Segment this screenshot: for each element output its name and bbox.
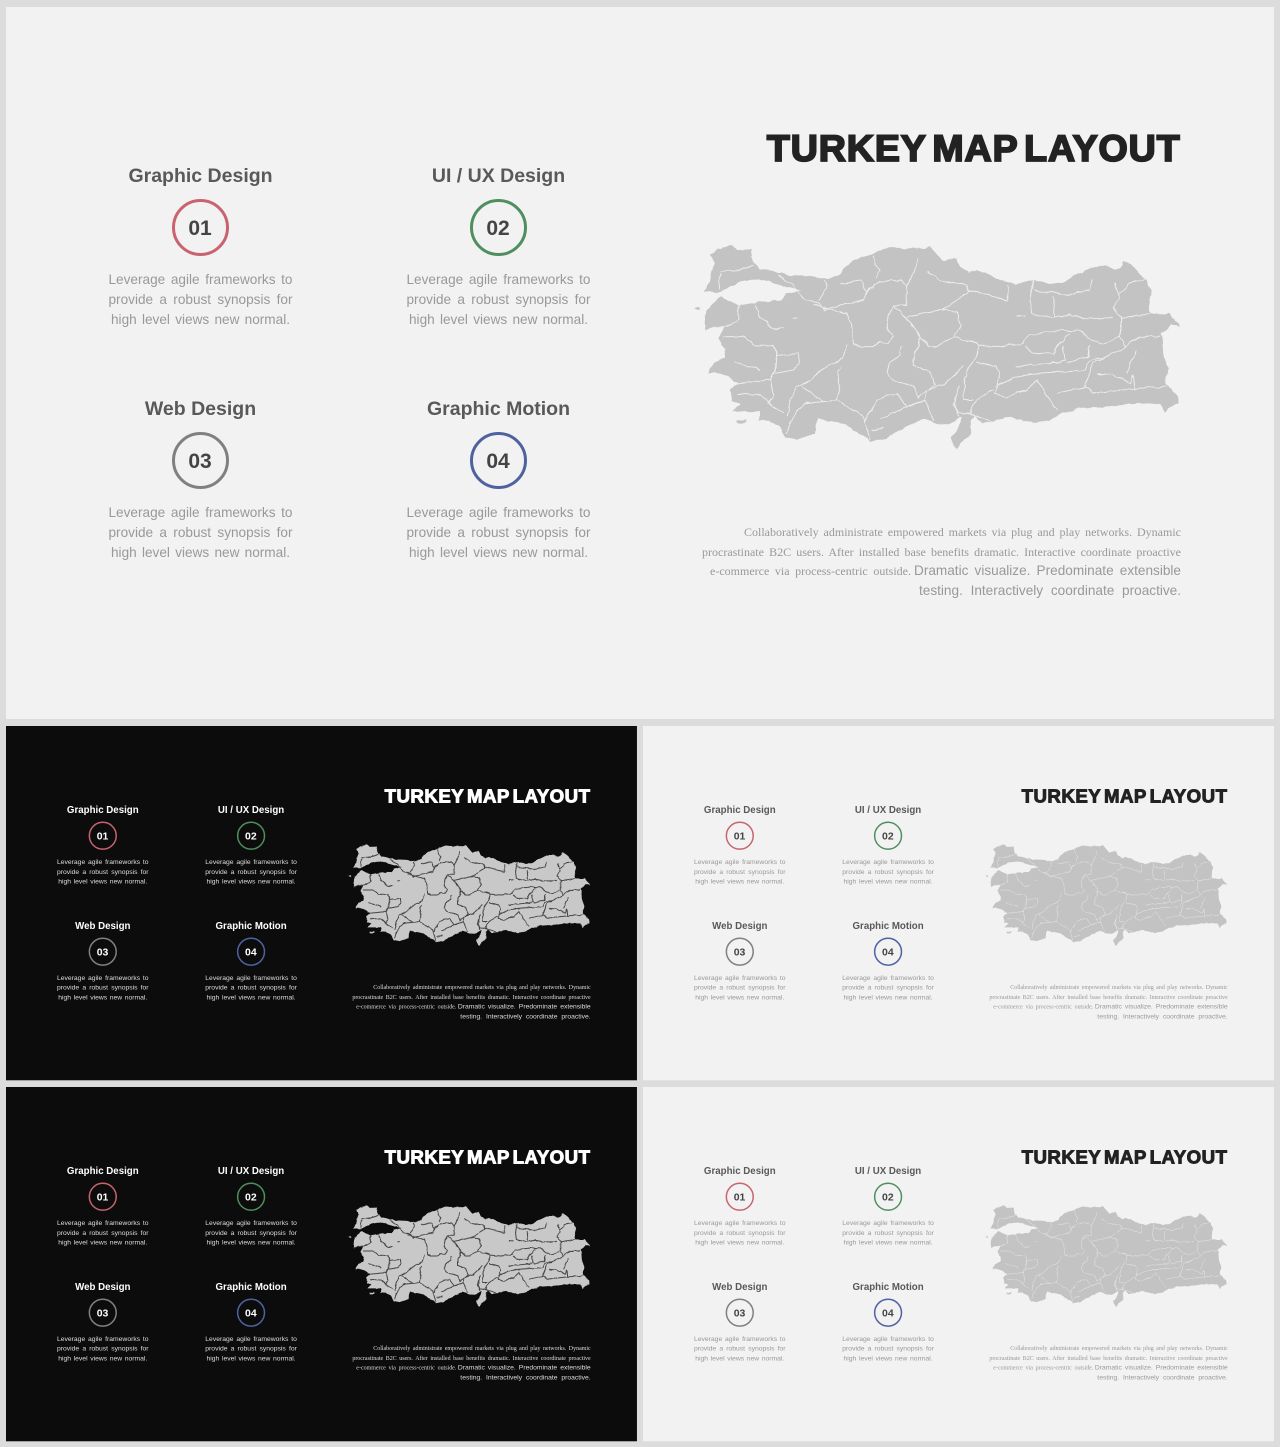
card: UI / UX Design — [406, 165, 590, 327]
description: Leverage agile frameworks to — [842, 858, 934, 865]
card: Web Design: provide a robust synopsis for — [57, 984, 149, 991]
description: Leverage agile frameworks to — [205, 1335, 297, 1342]
badge 02: 02 — [486, 217, 510, 240]
badge 04 — [874, 937, 902, 966]
card: Graphic Motion: high level views new normal. — [207, 1355, 296, 1362]
badge 02 — [237, 822, 265, 850]
heading: Web Design — [75, 921, 130, 932]
description: Leverage agile frameworks to — [57, 1335, 149, 1342]
card: Web Design: high level views new normal. — [58, 994, 147, 1001]
badge 04 — [470, 432, 526, 489]
heading: Graphic Design — [67, 805, 139, 816]
slide: small light top — [643, 726, 1274, 1080]
card: Graphic Design: provide a robust synopsis for — [57, 1229, 149, 1236]
card: Graphic Design — [694, 1166, 786, 1246]
slide: small light bottom — [643, 1087, 1274, 1441]
card: Graphic Motion: provide a robust synopsis for — [205, 1345, 297, 1352]
paragraph: procrastinate B2C users. After installed base benefits dramatic. Interactive coordinate proactive — [989, 994, 1228, 1001]
card: Graphic Motion: high level views new normal. — [409, 545, 588, 560]
card: UI / UX Design: high level views new normal. — [844, 878, 933, 885]
heading: Web Design — [75, 1282, 130, 1293]
card: Web Design — [694, 921, 786, 1001]
card: UI / UX Design: provide a robust synopsis for — [205, 868, 297, 875]
card: UI / UX Design: provide a robust synopsis for — [406, 292, 590, 307]
card: Graphic Motion — [205, 921, 297, 1001]
title: TURKEY MAP LAYOUT — [385, 1147, 591, 1168]
description: Leverage agile frameworks to — [694, 858, 786, 865]
slide: small dark top — [6, 726, 637, 1080]
map of Turkey — [348, 844, 590, 946]
card: Graphic Motion: high level views new normal. — [844, 1355, 933, 1362]
heading: Graphic Motion — [215, 1282, 287, 1293]
card: Web Design: provide a robust synopsis for — [57, 1345, 149, 1352]
badge 03: 03 — [97, 946, 108, 958]
card: Web Design: provide a robust synopsis for — [694, 984, 786, 991]
badge 01: 01 — [188, 217, 212, 240]
title: TURKEY MAP LAYOUT — [767, 128, 1181, 169]
card: Web Design — [694, 1282, 786, 1362]
paragraph: Collaboratively administrate empowered markets via plug and play networks. Dynamic — [744, 525, 1181, 539]
card: Graphic Motion: provide a robust synopsis for — [205, 984, 297, 991]
card: Web Design — [108, 398, 292, 560]
badge 02 — [874, 1183, 902, 1211]
heading: Graphic Motion — [215, 921, 287, 932]
badge 04 — [237, 1298, 265, 1327]
paragraph: Dramatic visualize. Predominate extensible — [1095, 1364, 1228, 1371]
badge 04: 04 — [245, 1307, 257, 1319]
card: Graphic Design — [694, 805, 786, 885]
description: Leverage agile frameworks to — [406, 505, 590, 520]
card: UI / UX Design: high level views new normal. — [844, 1239, 933, 1246]
badge 03: 03 — [188, 450, 212, 473]
paragraph: procrastinate B2C users. After installed base benefits dramatic. Interactive coordinate proactive — [702, 545, 1181, 559]
heading: Graphic Motion — [852, 1282, 924, 1293]
card: Web Design: high level views new normal. — [58, 1355, 147, 1362]
badge 01: 01 — [97, 830, 108, 842]
badge 02: 02 — [245, 1191, 257, 1203]
paragraph — [352, 1345, 591, 1381]
card: UI / UX Design: provide a robust synopsis for — [205, 1229, 297, 1236]
card: Graphic Design: provide a robust synopsis for — [694, 868, 786, 875]
card: UI / UX Design — [842, 1166, 934, 1246]
paragraph — [989, 1345, 1228, 1381]
title: TURKEY MAP LAYOUT — [385, 786, 591, 807]
badge 03: 03 — [734, 946, 745, 958]
card: Web Design: high level views new normal. — [111, 545, 290, 560]
paragraph: procrastinate B2C users. After installed base benefits dramatic. Interactive coordinate proactive — [352, 1355, 591, 1362]
heading: Graphic Motion — [852, 921, 924, 932]
badge 04: 04 — [882, 1307, 894, 1319]
paragraph: testing. Interactively coordinate proactive. — [1097, 1013, 1228, 1020]
paragraph: testing. Interactively coordinate proactive. — [460, 1013, 591, 1020]
description: Leverage agile frameworks to — [57, 858, 149, 865]
paragraph: e-commerce via process-centric outside. — [356, 1364, 456, 1371]
card: Graphic Motion — [205, 1282, 297, 1362]
paragraph: procrastinate B2C users. After installed base benefits dramatic. Interactive coordinate proactive — [989, 1355, 1228, 1362]
description: Leverage agile frameworks to — [108, 272, 292, 287]
description: Leverage agile frameworks to — [694, 1335, 786, 1342]
card: Web Design: high level views new normal. — [695, 1355, 784, 1362]
card: UI / UX Design — [205, 1166, 297, 1246]
slide: large light — [6, 7, 1274, 719]
badge 01: 01 — [97, 1191, 108, 1203]
description: Leverage agile frameworks to — [57, 974, 149, 981]
card: Graphic Motion — [406, 398, 590, 560]
paragraph: Collaboratively administrate empowered markets via plug and play networks. Dynamic — [373, 1345, 591, 1352]
description: Leverage agile frameworks to — [694, 1219, 786, 1226]
badge 01: 01 — [734, 1191, 745, 1203]
heading: Graphic Motion — [427, 398, 570, 420]
card: Web Design: provide a robust synopsis for — [694, 1345, 786, 1352]
paragraph: Dramatic visualize. Predominate extensible — [914, 563, 1181, 578]
badge 03: 03 — [734, 1307, 745, 1319]
description: Leverage agile frameworks to — [205, 974, 297, 981]
card: Web Design: high level views new normal. — [695, 994, 784, 1001]
badge 02: 02 — [882, 830, 894, 842]
description: Leverage agile frameworks to — [842, 974, 934, 981]
description: Leverage agile frameworks to — [694, 974, 786, 981]
paragraph: testing. Interactively coordinate proactive. — [1097, 1374, 1228, 1381]
card: UI / UX Design: provide a robust synopsis for — [842, 868, 934, 875]
badge 01 — [88, 1183, 117, 1211]
badge 01 — [725, 1183, 754, 1211]
badge 02 — [470, 199, 526, 256]
card: Graphic Motion — [842, 1282, 934, 1362]
paragraph: Dramatic visualize. Predominate extensible — [458, 1003, 591, 1010]
card: Graphic Design: provide a robust synopsis for — [108, 292, 292, 307]
description: Leverage agile frameworks to — [842, 1335, 934, 1342]
description: Leverage agile frameworks to — [406, 272, 590, 287]
badge 04: 04 — [486, 450, 510, 473]
badge 03 — [88, 937, 117, 966]
badge 02 — [237, 1183, 265, 1211]
paragraph — [989, 984, 1228, 1020]
description: Leverage agile frameworks to — [57, 1219, 149, 1226]
card: UI / UX Design: high level views new normal. — [207, 1239, 296, 1246]
map of Turkey — [986, 1205, 1227, 1307]
badge 01: 01 — [734, 830, 745, 842]
badge 02: 02 — [245, 830, 257, 842]
paragraph: Dramatic visualize. Predominate extensible — [1095, 1003, 1228, 1010]
card: Graphic Design: high level views new normal. — [111, 312, 290, 327]
paragraph: Collaboratively administrate empowered markets via plug and play networks. Dynamic — [373, 984, 591, 991]
heading: Graphic Design — [128, 165, 273, 187]
description: Leverage agile frameworks to — [205, 858, 297, 865]
badge 03 — [725, 1298, 754, 1327]
card: Graphic Design: high level views new normal. — [58, 1239, 147, 1246]
card: Graphic Design: high level views new normal. — [695, 1239, 784, 1246]
description: Leverage agile frameworks to — [205, 1219, 297, 1226]
badge 04 — [237, 937, 265, 966]
card: Graphic Motion: provide a robust synopsis for — [406, 525, 590, 540]
card: Graphic Motion — [842, 921, 934, 1001]
badge 03: 03 — [97, 1307, 108, 1319]
slide: small dark bottom — [6, 1087, 637, 1441]
title: TURKEY MAP LAYOUT — [1022, 786, 1228, 807]
badge 02: 02 — [882, 1191, 894, 1203]
card: Web Design — [57, 1282, 149, 1362]
paragraph: e-commerce via process-centric outside. — [993, 1003, 1093, 1010]
card: UI / UX Design — [205, 805, 297, 885]
card: UI / UX Design: provide a robust synopsis for — [842, 1229, 934, 1236]
heading: UI / UX Design — [855, 805, 921, 816]
card: Graphic Design — [57, 805, 149, 885]
heading: Graphic Design — [704, 1166, 776, 1177]
description: Leverage agile frameworks to — [842, 1219, 934, 1226]
paragraph: procrastinate B2C users. After installed base benefits dramatic. Interactive coordinate proactive — [352, 994, 591, 1001]
paragraph: testing. Interactively coordinate proactive. — [460, 1374, 591, 1381]
card: Graphic Design: high level views new normal. — [58, 878, 147, 885]
paragraph: Collaboratively administrate empowered markets via plug and play networks. Dynamic — [1010, 1345, 1228, 1352]
badge 04: 04 — [882, 946, 894, 958]
heading: UI / UX Design — [432, 165, 565, 187]
card: Graphic Design: high level views new normal. — [695, 878, 784, 885]
map of Turkey — [986, 844, 1227, 946]
badge 03 — [172, 432, 228, 489]
badge 01 — [725, 822, 754, 850]
heading: Graphic Design — [704, 805, 776, 816]
paragraph — [352, 984, 591, 1020]
badge 04: 04 — [245, 946, 257, 958]
heading: UI / UX Design — [855, 1166, 921, 1177]
description: Leverage agile frameworks to — [108, 505, 292, 520]
heading: Graphic Design — [67, 1166, 139, 1177]
paragraph — [702, 525, 1181, 598]
card: UI / UX Design: high level views new normal. — [207, 878, 296, 885]
heading: Web Design — [145, 398, 256, 420]
badge 03 — [725, 937, 754, 966]
card: Graphic Design — [108, 165, 292, 327]
badge 02 — [874, 822, 902, 850]
map of Turkey — [694, 245, 1180, 450]
card: Graphic Motion: high level views new normal. — [844, 994, 933, 1001]
card: Graphic Motion: provide a robust synopsis for — [842, 1345, 934, 1352]
card: Graphic Design — [57, 1166, 149, 1246]
map of Turkey — [348, 1205, 590, 1307]
card: Web Design — [57, 921, 149, 1001]
card: Graphic Design: provide a robust synopsis for — [694, 1229, 786, 1236]
card: Graphic Motion: high level views new normal. — [207, 994, 296, 1001]
badge 04 — [874, 1298, 902, 1327]
card: UI / UX Design — [842, 805, 934, 885]
paragraph: e-commerce via process-centric outside. — [710, 564, 911, 578]
badge 01 — [88, 822, 117, 850]
title: TURKEY MAP LAYOUT — [1022, 1147, 1228, 1168]
card: Graphic Design: provide a robust synopsis for — [57, 868, 149, 875]
paragraph: e-commerce via process-centric outside. — [356, 1003, 456, 1010]
paragraph: testing. Interactively coordinate proactive. — [919, 583, 1181, 598]
heading: Web Design — [712, 921, 767, 932]
heading: UI / UX Design — [218, 1166, 284, 1177]
badge 01 — [172, 199, 228, 256]
card: UI / UX Design: high level views new normal. — [409, 312, 588, 327]
paragraph: Dramatic visualize. Predominate extensible — [458, 1364, 591, 1371]
heading: UI / UX Design — [218, 805, 284, 816]
heading: Web Design — [712, 1282, 767, 1293]
paragraph: Collaboratively administrate empowered markets via plug and play networks. Dynamic — [1010, 984, 1228, 991]
paragraph: e-commerce via process-centric outside. — [993, 1364, 1093, 1371]
card: Web Design: provide a robust synopsis for — [108, 525, 292, 540]
card: Graphic Motion: provide a robust synopsis for — [842, 984, 934, 991]
badge 03 — [88, 1298, 117, 1327]
